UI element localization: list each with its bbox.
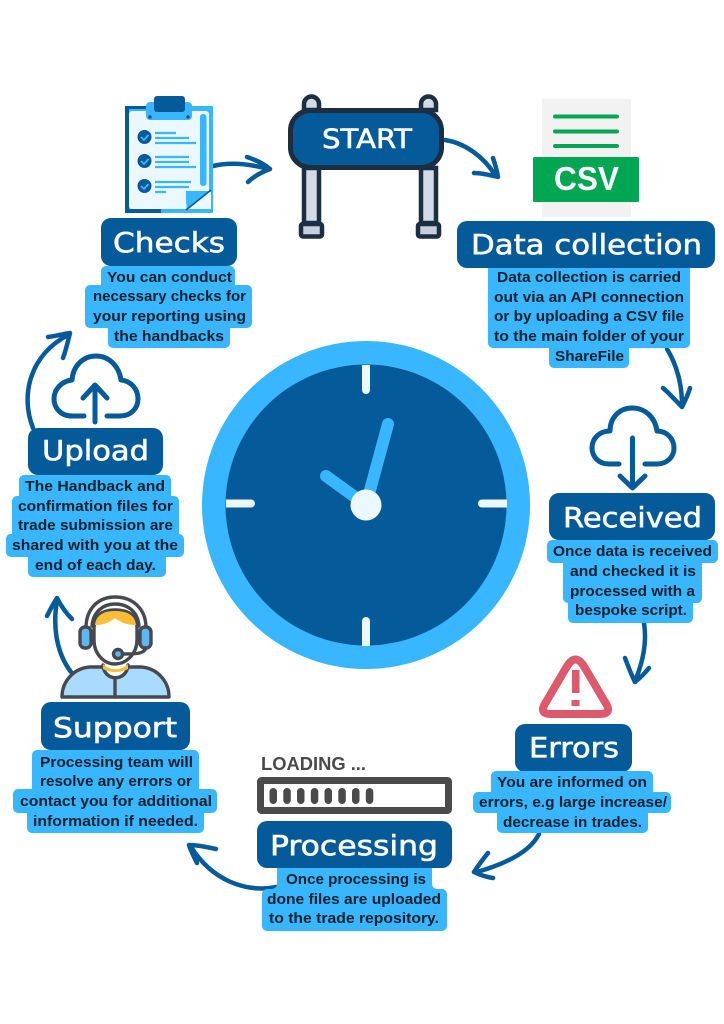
text block: processing	[262, 868, 447, 931]
arrow: support to upload	[47, 598, 72, 672]
arrow: data collection to received	[663, 349, 690, 407]
heading: received: Received	[563, 501, 702, 534]
text block: errors: errors, e.g large increase/	[479, 794, 668, 811]
step: upload	[6, 356, 184, 577]
heading: support: Support	[53, 711, 177, 744]
icon: cloud download	[592, 408, 674, 488]
text block: checks: the handbacks	[114, 328, 224, 345]
text block: errors: decrease in trades.	[503, 814, 642, 831]
heading: checks	[101, 218, 237, 266]
heading: data collection	[457, 221, 715, 268]
heading: data collection: Data collection	[471, 228, 702, 261]
text block: data collection: Data collection is carried	[497, 269, 681, 286]
text block: checks: your reporting using	[93, 308, 246, 325]
arrow: errors to processing	[474, 834, 539, 878]
heading: processing: Processing	[270, 829, 438, 862]
text block: upload: end of each day.	[35, 557, 156, 574]
arrow: processing to support	[189, 845, 277, 888]
text block: support	[13, 750, 217, 833]
arrow: checks to start	[213, 157, 270, 182]
text block: data collection	[488, 268, 690, 368]
text block: received: processed with a	[570, 583, 696, 600]
text block: data collection: to the main folder of your	[494, 328, 684, 345]
text block: errors: You are informed on	[497, 774, 647, 791]
central clock	[202, 341, 530, 669]
heading: support	[41, 702, 190, 750]
text block: errors	[473, 771, 671, 833]
arrow: received to errors	[625, 623, 649, 682]
text block: received	[547, 540, 718, 623]
icon: csv file	[533, 99, 639, 217]
text block: checks: necessary checks for	[93, 288, 246, 305]
text block: data collection: or by uploading a CSV file	[494, 308, 684, 325]
step: start sign	[290, 97, 442, 237]
step: data collection	[457, 99, 715, 368]
icon: sign posts	[301, 97, 439, 237]
text block: upload: trade submission are	[18, 517, 173, 534]
text block: support: contact you for additional	[20, 793, 212, 810]
text block: upload	[6, 475, 184, 577]
heading: processing	[257, 821, 452, 868]
icon: loading bar	[260, 754, 448, 810]
heading: start: START	[322, 124, 413, 155]
text block: upload: The Handback and	[25, 478, 165, 495]
text block: checks	[85, 266, 252, 348]
heading: upload: Upload	[42, 434, 149, 467]
heading: upload	[28, 428, 163, 475]
step: processing	[257, 754, 452, 931]
text block: processing: done files are uploaded	[267, 891, 441, 908]
step: checks	[85, 96, 252, 348]
icon: clipboard	[125, 96, 213, 213]
text block: checks: You can conduct	[107, 269, 232, 286]
heading: errors: Errors	[529, 731, 619, 764]
text block: received: and checked it is	[570, 563, 696, 580]
step: support	[13, 597, 217, 833]
text block: processing: Once processing is	[286, 871, 426, 888]
sign board	[290, 110, 442, 168]
icon: support agent	[62, 597, 169, 697]
icon: cloud upload	[54, 356, 138, 422]
arrow: upload to checks	[28, 333, 70, 428]
text block: support: resolve any errors or	[40, 773, 192, 790]
icon: csv file: CSV	[554, 160, 619, 197]
heading: received	[549, 493, 715, 540]
text block: upload: confirmation files for	[18, 498, 173, 515]
text block: received: Once data is received	[553, 543, 712, 560]
text block: data collection: ShareFile	[555, 348, 624, 365]
heading: checks: Checks	[113, 226, 225, 259]
text block: data collection: out via an API connection	[494, 289, 684, 306]
icon: loading bar: LOADING ...	[261, 754, 366, 774]
text block: processing: to the trade repository.	[269, 910, 439, 927]
icon: warning triangle	[543, 660, 608, 714]
step: received	[547, 408, 718, 623]
step: errors	[473, 660, 671, 833]
text block: received: bespoke script.	[575, 602, 687, 619]
heading: errors	[515, 724, 632, 772]
arrow: start to data collection	[445, 140, 498, 177]
text block: upload: shared with you at the	[12, 537, 178, 554]
text block: support: Processing team will	[40, 754, 193, 771]
text block: support: information if needed.	[33, 813, 198, 830]
